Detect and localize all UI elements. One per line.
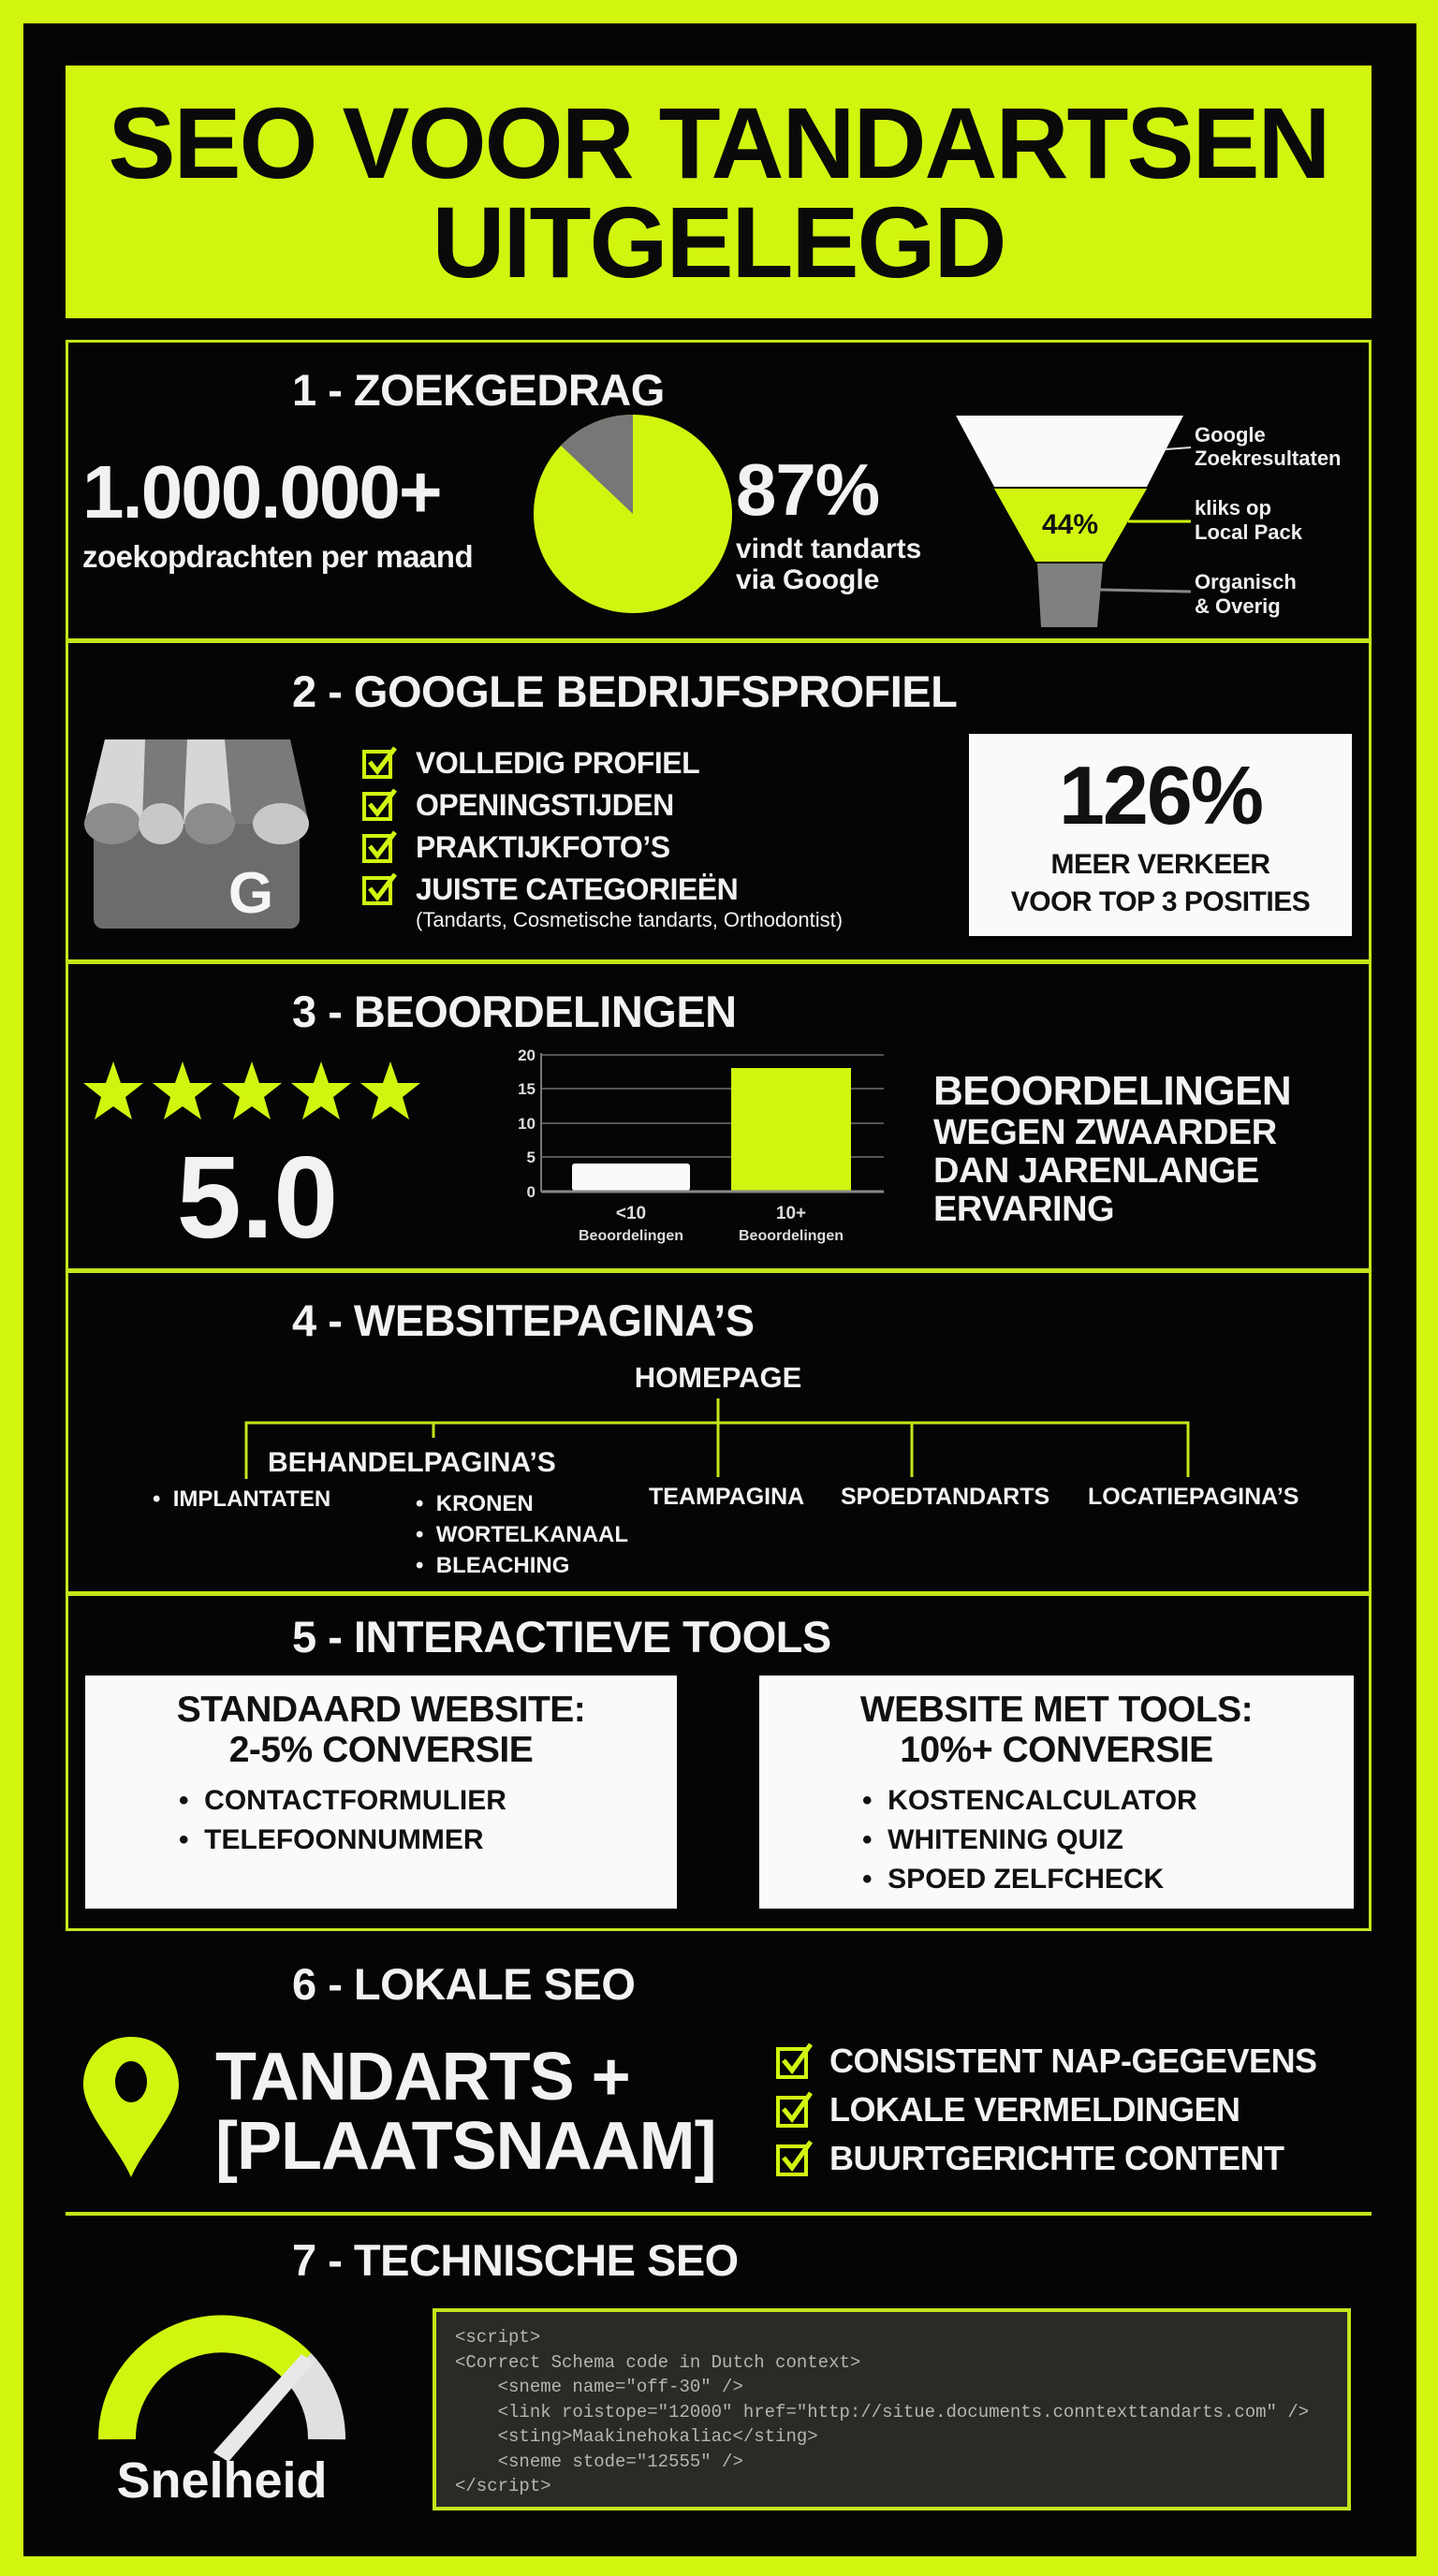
funnel: Zoekresultaten: [1195, 446, 1341, 470]
bar chart: Beoordelingen: [739, 1228, 844, 1244]
keyword: tandarts + plaatsnaam: [PLAATSNAAM]: [215, 2109, 716, 2184]
stat: 87%: 87%: [736, 448, 879, 531]
text: reviews weigh more: WEGEN ZWAARDER: [933, 1113, 1277, 1152]
bar chart: 5: [527, 1149, 536, 1166]
node: treatments: • WORTELKANAAL: [416, 1522, 628, 1547]
heading 1: 1 - ZOEKGEDRAG: [292, 365, 665, 415]
rating 5.0: 5.0: [177, 1134, 338, 1263]
callout: 126%: 126%: [1059, 749, 1262, 842]
text: reviews weigh more: ERVARING: [933, 1190, 1114, 1229]
item: PRAKTIJKFOTO’S: [416, 829, 670, 863]
node: treatments: [416, 1491, 628, 1578]
bar chart: 10+: [776, 1204, 806, 1223]
stat: searches: zoekopdrachten per maand: [82, 539, 473, 574]
title: UITGELEGD: [432, 185, 1005, 299]
funnel: Google: [1195, 423, 1266, 446]
heading 2: 2 - GOOGLE BEDRIJFSPROFIEL: [292, 666, 957, 716]
icon: stars: [83, 1061, 420, 1120]
card: with tools: • WHITENING QUIZ: [862, 1824, 1123, 1855]
panel: 5 interactieve tools: [66, 1593, 1372, 1931]
node: implantaten: • IMPLANTATEN: [153, 1486, 330, 1512]
text: reviews weigh more: BEOORDELINGEN: [933, 1068, 1291, 1114]
stat: searches: [82, 450, 473, 574]
node: homepage: HOMEPAGE: [635, 1361, 801, 1394]
icon: map pin: [83, 2037, 179, 2177]
card: with tools: • KOSTENCALCULATOR: [862, 1785, 1197, 1816]
funnel: kliks op: [1195, 496, 1271, 520]
node: treatments: • BLEACHING: [416, 1553, 569, 1578]
stat: 87%: via Google: [736, 564, 879, 595]
heading 5: 5 - INTERACTIEVE TOOLS: [292, 1612, 831, 1661]
funnel: & Overig: [1195, 594, 1281, 618]
card: with tools: WEBSITE MET TOOLS:: [860, 1690, 1253, 1730]
icon: speed gauge: [98, 2315, 345, 2509]
stat: searches: 1.000.000+: [82, 450, 441, 534]
heading 7: 7 - TECHNISCHE SEO: [292, 2235, 739, 2285]
bar chart: 20: [518, 1046, 536, 1064]
keyword: tandarts + plaatsnaam: TANDARTS +: [215, 2040, 630, 2115]
node: team: TEAMPAGINA: [649, 1484, 804, 1510]
card: with tools: 10%+ CONVERSIE: [900, 1730, 1213, 1770]
panel: 2 google bedrijfsprofiel: [66, 640, 1372, 962]
callout: 126%: [969, 734, 1352, 936]
panel: 3 beoordelingen: [66, 961, 1372, 1271]
bar chart: <10: [616, 1204, 646, 1223]
subtext: (Tandarts, Cosmetische tandarts, Orthodontist): [416, 908, 843, 931]
item: LOKALE VERMELDINGEN: [829, 2090, 1240, 2129]
icon: google business store: [84, 739, 309, 929]
keyword: tandarts + plaatsnaam: [215, 2040, 716, 2184]
callout: 126%: VOOR TOP 3 POSITIES: [1011, 886, 1310, 917]
heading 6: 6 - LOKALE SEO: [292, 1959, 635, 2009]
heading 4: 4 - WEBSITEPAGINA’S: [292, 1295, 755, 1345]
stat: 87%: vindt tandarts: [736, 534, 921, 564]
text: reviews weigh more: [933, 1068, 1291, 1229]
item: VOLLEDIG PROFIEL: [416, 745, 699, 779]
card: with tools: • SPOED ZELFCHECK: [862, 1864, 1164, 1895]
callout: 126%: MEER VERKEER: [1050, 849, 1270, 880]
node: treatments: • KRONEN: [416, 1491, 534, 1516]
card: standaard: • CONTACTFORMULIER: [179, 1785, 506, 1816]
node: locatie: LOCATIEPAGINA’S: [1088, 1484, 1299, 1510]
card: standaard: 2-5% CONVERSIE: [229, 1730, 533, 1770]
card: standaard: STANDAARD WEBSITE:: [177, 1690, 585, 1730]
funnel: [956, 416, 1341, 627]
pie chart: [534, 415, 732, 613]
panel: 4 websitepaginas: [66, 1270, 1372, 1594]
bar chart: 0: [527, 1183, 536, 1201]
item: CONSISTENT NAP-GEGEVENS: [829, 2042, 1317, 2080]
checklist: profile: [362, 745, 843, 931]
item: OPENINGSTIJDEN: [416, 788, 674, 822]
bar chart: [518, 1046, 884, 1244]
item: BUURTGERICHTE CONTENT: [829, 2139, 1284, 2177]
stat: 87%: [736, 448, 921, 595]
panel: 1 zoekgedrag: [66, 340, 1372, 641]
icon: speed gauge: Snelheid: [116, 2452, 328, 2509]
card: standaard: • TELEFOONNUMMER: [179, 1824, 483, 1855]
card: standaard: [85, 1676, 677, 1909]
checklist: local: [776, 2042, 1317, 2177]
bar chart: 15: [518, 1080, 536, 1098]
funnel: 44%: [1042, 509, 1098, 540]
node: behandel: BEHANDELPAGINA’S: [268, 1447, 556, 1478]
site tree: [153, 1361, 1299, 1578]
bar chart: Beoordelingen: [579, 1228, 683, 1244]
code block: <script> <Correct Schema code in Dutch context> <sneme name="off-30" /> <link roistope="12000" href="http://situe.documents.conntexttandarts.com" /> <sting>Maakinehokaliac</sting> <sneme stode="12555" /> </script>: [455, 2327, 1309, 2496]
title: SEO VOOR TANDARTSEN: [108, 86, 1329, 199]
funnel: Local Pack: [1195, 520, 1303, 544]
item: JUISTE CATEGORIEËN: [416, 872, 738, 906]
heading 3: 3 - BEOORDELINGEN: [292, 987, 737, 1036]
funnel: Organisch: [1195, 570, 1297, 593]
card: with tools: [759, 1676, 1354, 1909]
node: spoed: SPOEDTANDARTS: [841, 1484, 1049, 1510]
bar chart: 10: [518, 1115, 536, 1133]
text: reviews weigh more: DAN JARENLANGE: [933, 1151, 1259, 1191]
title: [66, 66, 1372, 318]
icon: google business store: G: [228, 861, 273, 926]
